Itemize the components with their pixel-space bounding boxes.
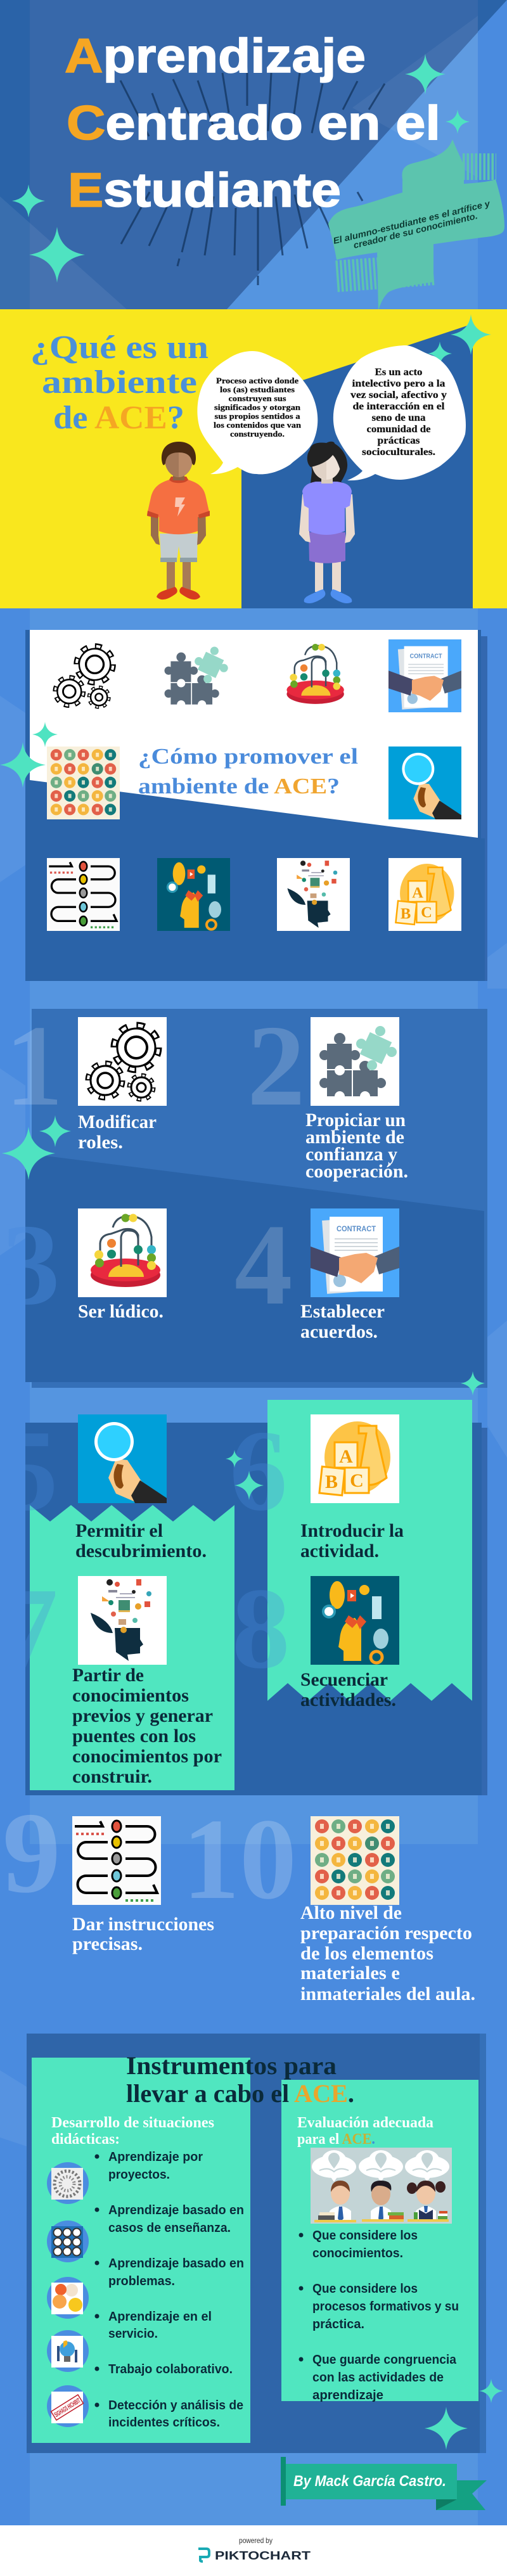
icon: stamp thumbnail: SIGHAGS HICHIBIT	[53, 2397, 82, 2419]
icon: abc blocks and flask	[388, 858, 461, 931]
step labels: conocimientos por	[72, 1746, 222, 1767]
speech bubble right: seno de una	[371, 413, 426, 423]
icon: open mind	[277, 858, 350, 931]
icon: sparkles	[2, 1115, 71, 1180]
icon: abc blocks and flask: C	[350, 1470, 364, 1491]
footer: powered by piktochart: PIKTOCHART	[215, 2549, 311, 2562]
step labels: inmateriales del aula.	[300, 1983, 475, 2004]
step labels: de los elementos	[300, 1943, 433, 1964]
bullet list: evaluation: con las actividades de	[312, 2371, 444, 2385]
title: Estudiante	[68, 163, 341, 217]
speech bubble left	[197, 351, 318, 474]
heading: how to promote: ¿Cómo promover el	[138, 744, 358, 769]
icon: stamp thumbnail	[47, 2385, 89, 2427]
icon: open mind	[78, 1576, 167, 1665]
icon: doodle thumbnail	[47, 2162, 89, 2204]
speech bubble right: Es un acto	[375, 367, 423, 378]
panel: header	[0, 0, 507, 311]
title: Centrado en el	[67, 96, 440, 150]
icon: grid of circles	[311, 1816, 399, 1905]
step labels	[78, 1110, 408, 1342]
big numbers: 6	[229, 1406, 288, 1535]
bullet list: evaluation: práctica.	[312, 2317, 364, 2331]
speech bubble left: sus propios sentidos a	[214, 412, 300, 421]
bullet list: didactic situations: problemas.	[108, 2274, 175, 2288]
heading: how to promote: ambiente de ACE ?	[138, 774, 340, 798]
icon: question bubbles thumbnail	[47, 2277, 89, 2319]
step labels: Propiciar un	[305, 1110, 406, 1131]
speech bubble right: prácticas	[378, 435, 420, 446]
icon: head with ideas	[311, 1576, 399, 1665]
card: didactic situations	[32, 2058, 250, 2443]
icon: abc blocks and flask: B	[401, 905, 411, 922]
step labels	[72, 1520, 404, 1787]
title	[65, 29, 440, 217]
big numbers: 10	[183, 1795, 297, 1923]
heading: instruments	[126, 2051, 354, 2108]
bullet list: didactic situations: Trabajo colaborativo.	[108, 2362, 233, 2376]
icon: bead toy	[286, 644, 344, 704]
bullet list: evaluation: conocimientos.	[312, 2246, 403, 2260]
speech bubble left: los contenidos que van	[214, 421, 301, 430]
footer: powered by piktochart: powered by	[239, 2536, 273, 2545]
heading: what is: ¿Qué es un	[30, 330, 209, 366]
icon: magnifier	[388, 747, 461, 819]
speech bubble left: construyendo.	[230, 430, 285, 439]
icon: girl	[299, 442, 355, 603]
icon: contract handshake	[311, 1208, 399, 1297]
bullet list: evaluation: procesos formativos y su	[312, 2300, 459, 2314]
icon: abc blocks and flask	[311, 1414, 399, 1503]
heading: how to promote	[138, 744, 358, 798]
subheading: evaluation	[297, 2115, 433, 2148]
speech bubble left: Proceso activo donde	[216, 376, 299, 385]
icon: abc blocks and flask: A	[412, 884, 423, 901]
bullet list: didactic situations: Aprendizaje basado en	[108, 2203, 244, 2217]
bullet list: evaluation: Que guarde congruencia	[312, 2353, 457, 2367]
icon: numbered steps	[47, 858, 120, 931]
icon: head with ideas	[157, 858, 230, 931]
big numbers: 1	[5, 1001, 63, 1130]
speech bubble right	[333, 345, 466, 480]
icon: magnifier	[78, 1414, 167, 1503]
card: evaluation	[281, 2080, 478, 2401]
subheading: evaluation: Evaluación adecuada	[297, 2115, 433, 2131]
subheading: evaluation: para el ACE.	[297, 2131, 375, 2148]
icon: numbered steps	[72, 1816, 161, 1905]
step labels	[72, 1902, 475, 2004]
icon: puzzle	[311, 1017, 399, 1106]
step labels: precisas.	[72, 1933, 143, 1954]
heading: what is	[30, 330, 209, 436]
bullet list: evaluation	[299, 2229, 459, 2402]
big numbers: 5	[0, 1406, 58, 1535]
step labels: materiales e	[300, 1963, 400, 1983]
icon: puzzle	[165, 646, 228, 705]
step labels: roles.	[78, 1132, 123, 1153]
icon: contract handshake	[388, 639, 461, 712]
icon: blue tiles thumbnail	[47, 2220, 89, 2262]
card: right	[267, 1400, 472, 1701]
panel: what is an ACE environment	[0, 309, 507, 608]
bullet list: evaluation: Que considere los	[312, 2282, 418, 2296]
step labels: Modificar	[78, 1112, 157, 1132]
step labels: preparación respecto	[300, 1923, 472, 1944]
icon: teamwork bulb thumbnail	[47, 2330, 89, 2372]
icon: section sparkles	[0, 722, 58, 788]
bullet list: evaluation: Que considere los	[312, 2229, 418, 2243]
icon: sparkles	[425, 2379, 503, 2450]
speech bubble right: socioculturales.	[362, 447, 435, 458]
bullet list: didactic situations: servicio.	[108, 2327, 158, 2341]
icon: bead toy	[78, 1208, 167, 1297]
card: left	[30, 1505, 234, 1790]
icon: boy	[147, 442, 210, 599]
speech bubble right: vez social, afectivo y	[350, 390, 447, 400]
icon: gears	[78, 1017, 167, 1106]
icon: contract handshake: CONTRACT	[337, 1224, 376, 1233]
step labels: Introducir la	[300, 1520, 404, 1541]
speech bubble left: los (as) estudiantes	[220, 385, 295, 394]
step labels: Permitir el	[75, 1520, 163, 1541]
big numbers: 3	[2, 1200, 60, 1329]
speech bubble left: construyen sus	[228, 394, 286, 403]
icon: abc blocks and flask: A	[339, 1446, 353, 1467]
step labels: actividades.	[300, 1689, 396, 1710]
speech bubble right: de interacción en el	[352, 401, 445, 412]
footer: powered by piktochart	[0, 2525, 507, 2576]
big numbers	[3, 1788, 297, 1923]
heading: instruments: Instrumentos para	[126, 2051, 337, 2080]
subheading: didactic situations	[51, 2115, 214, 2148]
panel: steps nine and ten	[3, 1788, 475, 2004]
step labels: descubrimiento.	[75, 1541, 207, 1561]
bullet list: didactic situations	[95, 2150, 244, 2430]
step labels: confianza y	[305, 1144, 397, 1165]
speech bubble right: comunidad de	[366, 424, 431, 435]
big numbers: 9	[3, 1788, 61, 1917]
step labels: construir.	[72, 1766, 152, 1787]
title: Aprendizaje	[65, 29, 366, 83]
step labels: previos y generar	[72, 1705, 213, 1726]
subheading: didactic situations: didácticas:	[51, 2131, 120, 2148]
step labels: cooperación.	[305, 1161, 408, 1182]
step labels: actividad.	[300, 1541, 379, 1561]
icon: grid of circles	[47, 747, 120, 819]
image: students at desks	[311, 2148, 452, 2224]
icon: sparkles	[428, 314, 491, 366]
ribbon text: creador de su conocimiento.	[352, 210, 478, 250]
big numbers: 4	[234, 1200, 293, 1329]
step labels: Establecer	[300, 1301, 385, 1322]
ribbon text: El alumno-estudiante es el artífice y	[332, 198, 492, 246]
big numbers: 2	[247, 1001, 305, 1130]
subheading: didactic situations: Desarrollo de situaciones	[51, 2115, 214, 2131]
step labels: puentes con los	[72, 1726, 196, 1746]
icon: abc blocks and flask: B	[325, 1471, 338, 1492]
panel: steps one to four	[2, 1001, 487, 1388]
big numbers: 8	[232, 1564, 290, 1693]
bullet list: didactic situations: Aprendizaje en el	[108, 2310, 212, 2324]
step labels: Ser lúdico.	[78, 1301, 164, 1322]
bullet list: didactic situations: Detección y análisis de	[108, 2399, 243, 2413]
speech bubble left: significados y otorgan	[214, 403, 300, 412]
step labels: Dar instrucciones	[72, 1914, 214, 1935]
icon: gears	[53, 643, 116, 709]
ribbon: author credit: By Mack García Castro.	[293, 2473, 446, 2490]
big numbers	[2, 1001, 305, 1329]
icon: sparkles	[226, 1371, 485, 1500]
heading: what is: de ACE?	[53, 400, 184, 436]
step labels: Alto nivel de	[300, 1902, 402, 1923]
step labels: Partir de	[72, 1665, 144, 1686]
icon: piktochart logo	[198, 2549, 209, 2561]
bullet list: evaluation: aprendizaje	[312, 2388, 383, 2402]
step labels: Secuenciar	[300, 1669, 388, 1690]
bullet list: didactic situations: proyectos.	[108, 2168, 170, 2182]
panel: steps five to eight	[0, 1371, 487, 1795]
heading: what is: ambiente	[42, 364, 197, 400]
big numbers: 7	[0, 1564, 58, 1693]
icon: abc blocks and flask: C	[421, 904, 432, 921]
step labels: acuerdos.	[300, 1321, 378, 1342]
icon: contract handshake: CONTRACT	[410, 653, 442, 660]
big numbers	[0, 1406, 290, 1693]
heading: instruments: llevar a cabo el ACE.	[126, 2079, 354, 2108]
speech bubble right: intelectivo pero a la	[352, 378, 446, 389]
bullet list: didactic situations: incidentes críticos.	[108, 2416, 220, 2430]
bullet list: didactic situations: Aprendizaje por	[108, 2150, 203, 2164]
bullet list: didactic situations: casos de enseñanza.	[108, 2221, 231, 2235]
step labels: conocimientos	[72, 1685, 189, 1706]
panel: how to promote	[25, 630, 487, 981]
icon: header sparkles	[12, 54, 470, 283]
bullet list: didactic situations: Aprendizaje basado en	[108, 2257, 244, 2271]
panel: instruments	[27, 2034, 503, 2453]
ribbon: banner	[328, 139, 504, 311]
step labels: ambiente de	[305, 1127, 404, 1148]
ribbon: author credit	[281, 2457, 487, 2510]
